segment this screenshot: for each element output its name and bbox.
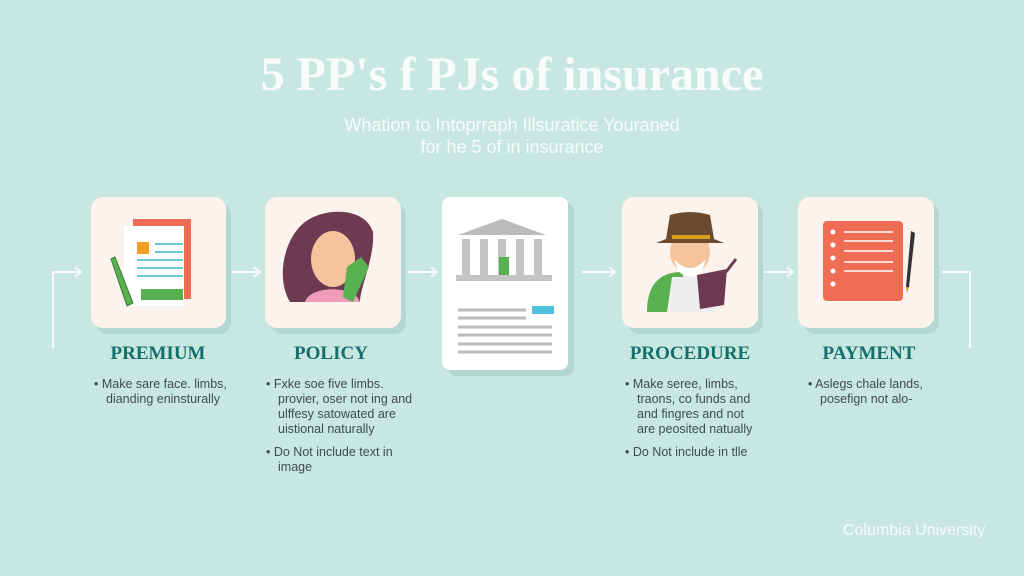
card: procedure xyxy=(622,197,758,328)
card: premium xyxy=(91,197,226,328)
text: premium: • Make sare face. limbs, dianding eninsturally xyxy=(94,377,227,406)
heading: payment: PAYMENT xyxy=(823,343,915,364)
card: payment xyxy=(798,197,934,328)
text: payment: • Aslegs chale lands, posefign not alo- xyxy=(808,377,923,406)
title: 5 PP's f PJs of insurance xyxy=(261,48,763,101)
card: center document xyxy=(442,197,568,370)
text: policy xyxy=(266,377,412,474)
subtitle xyxy=(344,115,680,157)
footer: university: Columbia University xyxy=(843,522,985,539)
heading: premium: PREMIUM xyxy=(110,343,205,364)
subtitle: Whation to Intoprraph Illsuratice Youraned xyxy=(344,115,680,135)
heading: procedure: PROCEDURE xyxy=(630,343,750,364)
text: procedure: • Make seree, limbs, traons, co funds and and fingres and not are peosited natually xyxy=(625,377,752,436)
text: procedure: • Do Not include in tlle xyxy=(625,445,748,459)
subtitle: for he 5 of in insurance xyxy=(420,137,604,157)
text: policy: • Fxke soe five limbs. provier, oser not ing and ulffesy satowated are uistional naturally xyxy=(266,377,412,436)
text: policy: • Do Not include text in image xyxy=(266,445,393,474)
heading: policy: POLICY xyxy=(294,343,368,364)
card: policy xyxy=(265,197,401,328)
